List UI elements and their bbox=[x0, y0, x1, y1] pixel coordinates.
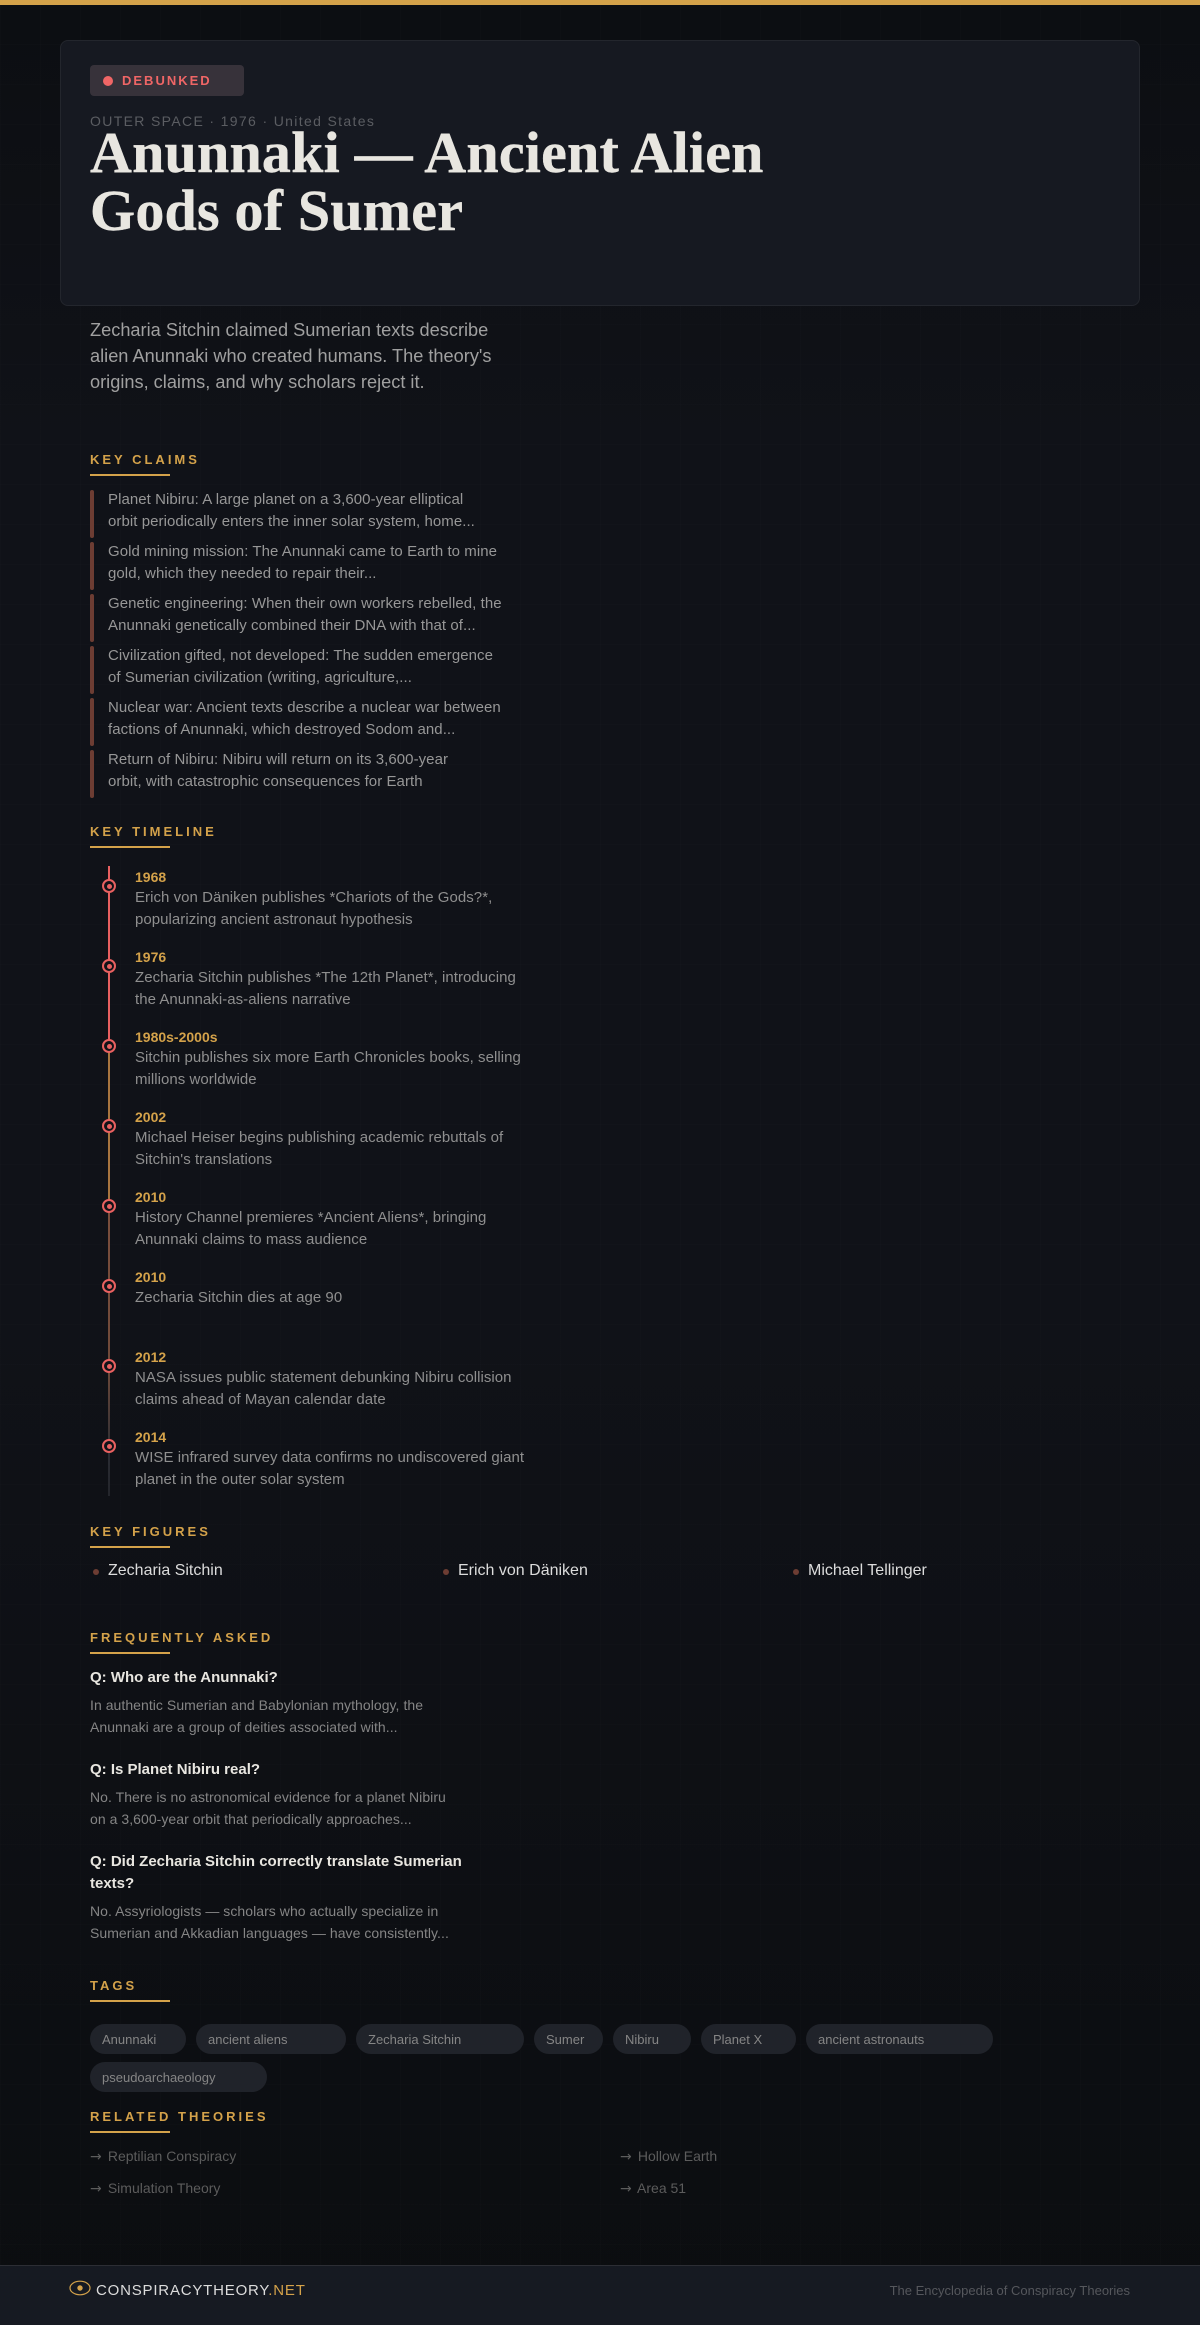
link: → Reptilian Conspiracy bbox=[90, 2148, 236, 2165]
event 2010 bbox=[102, 1189, 486, 1248]
event 2002 bbox=[102, 1109, 504, 1168]
panel: header card bbox=[60, 40, 1140, 306]
description: origins, claims, and why scholars reject it. bbox=[90, 372, 425, 392]
tag bbox=[90, 2062, 267, 2092]
heading: frequently asked: FREQUENTLY ASKED bbox=[90, 1630, 273, 1645]
event 2014: 2014 bbox=[135, 1429, 166, 1445]
faq 3: texts? bbox=[90, 1875, 134, 1892]
claim 5: factions of Anunnaki, which destroyed Sodom and... bbox=[108, 721, 455, 738]
tags bbox=[90, 2024, 993, 2092]
claim 6 bbox=[90, 750, 448, 798]
top accent bar bbox=[0, 0, 1200, 5]
event 1980s-2000s: 1980s-2000s bbox=[135, 1029, 218, 1045]
event 1976: the Anunnaki-as-aliens narrative bbox=[135, 991, 351, 1008]
related links bbox=[90, 2148, 717, 2197]
title bbox=[90, 120, 764, 243]
claim 1: orbit periodically enters the inner solar system, home... bbox=[108, 513, 475, 530]
claim 5 bbox=[90, 698, 501, 746]
event 1968: 1968 bbox=[135, 869, 166, 885]
event 1968: popularizing ancient astronaut hypothesis bbox=[135, 911, 413, 928]
tag bbox=[701, 2024, 796, 2054]
faq 3 bbox=[90, 1853, 462, 1941]
event 1980s-2000s: millions worldwide bbox=[135, 1071, 257, 1088]
claim 6: orbit, with catastrophic consequences for Earth bbox=[108, 773, 423, 790]
tag bbox=[90, 2024, 186, 2054]
event 2002: Sitchin's translations bbox=[135, 1151, 272, 1168]
icon: eye bbox=[69, 2280, 91, 2296]
badge: debunked bbox=[90, 65, 244, 96]
link: → Area 51 bbox=[620, 2180, 686, 2197]
event 2014: WISE infrared survey data confirms no undiscovered giant bbox=[135, 1449, 524, 1466]
event 2002: 2002 bbox=[135, 1109, 166, 1125]
claim 4: Civilization gifted, not developed: The sudden emergence bbox=[108, 647, 493, 664]
tag: ancient aliens bbox=[208, 2032, 288, 2047]
event 2010 death: 2010 bbox=[135, 1269, 166, 1285]
claim 2: Gold mining mission: The Anunnaki came to Earth to mine bbox=[108, 543, 497, 560]
event 2010: Anunnaki claims to mass audience bbox=[135, 1231, 367, 1248]
tag bbox=[356, 2024, 524, 2054]
link: → Hollow Earth bbox=[620, 2148, 717, 2165]
tag: pseudoarchaeology bbox=[102, 2070, 215, 2085]
heading: key timeline: KEY TIMELINE bbox=[90, 824, 217, 839]
faq 2: Q: Is Planet Nibiru real? bbox=[90, 1761, 260, 1778]
claim 4: of Sumerian civilization (writing, agriculture,... bbox=[108, 669, 412, 686]
footer tagline: The Encyclopedia of Conspiracy Theories bbox=[890, 2283, 1130, 2298]
tag: Sumer bbox=[546, 2032, 584, 2047]
faq 1: Q: Who are the Anunnaki? bbox=[90, 1669, 278, 1686]
event 1968: Erich von Däniken publishes *Chariots of the Gods?*, bbox=[135, 889, 492, 906]
faq 3: Sumerian and Akkadian languages — have consistently... bbox=[90, 1925, 449, 1941]
description bbox=[90, 320, 492, 392]
heading: related theories: RELATED THEORIES bbox=[90, 2109, 268, 2124]
event 2012: 2012 bbox=[135, 1349, 166, 1365]
event 2010 death bbox=[102, 1269, 342, 1306]
faq 3: Q: Did Zecharia Sitchin correctly translate Sumerian bbox=[90, 1853, 462, 1870]
event 2002: Michael Heiser begins publishing academic rebuttals of bbox=[135, 1129, 503, 1146]
tag: ancient astronauts bbox=[818, 2032, 924, 2047]
tag bbox=[534, 2024, 603, 2054]
heading: key claims: KEY CLAIMS bbox=[90, 452, 200, 467]
tag bbox=[196, 2024, 346, 2054]
event 1968 bbox=[102, 869, 492, 928]
event 2012: NASA issues public statement debunking Nibiru collision bbox=[135, 1369, 512, 1386]
claim 2 bbox=[90, 542, 497, 590]
badge: debunked: DEBUNKED bbox=[122, 73, 212, 88]
figure: Zecharia Sitchin: Zecharia Sitchin bbox=[108, 1562, 223, 1579]
event 2010: 2010 bbox=[135, 1189, 166, 1205]
claim 3: Anunnaki genetically combined their DNA with that of... bbox=[108, 617, 476, 634]
tag: Nibiru bbox=[625, 2032, 659, 2047]
tag bbox=[806, 2024, 993, 2054]
event 2014 bbox=[102, 1429, 524, 1488]
link: → Simulation Theory bbox=[90, 2180, 220, 2197]
event 1980s-2000s bbox=[102, 1029, 521, 1088]
claim 4 bbox=[90, 646, 493, 694]
event 1976 bbox=[102, 949, 516, 1008]
figure: Erich von Däniken: Erich von Däniken bbox=[458, 1562, 588, 1579]
faq 1: Anunnaki are a group of deities associated with... bbox=[90, 1719, 398, 1735]
claim 3 bbox=[90, 594, 502, 642]
tag bbox=[613, 2024, 691, 2054]
faq 1 bbox=[90, 1669, 423, 1735]
description: alien Anunnaki who created humans. The theory's bbox=[90, 346, 492, 366]
title: Anunnaki — Ancient Alien bbox=[90, 120, 764, 185]
footer bbox=[0, 2265, 1200, 2325]
event 1980s-2000s: Sitchin publishes six more Earth Chronicles books, selling bbox=[135, 1049, 521, 1066]
heading: tags: TAGS bbox=[90, 1978, 137, 1993]
faq 2: No. There is no astronomical evidence for a planet Nibiru bbox=[90, 1789, 446, 1805]
event 2010: History Channel premieres *Ancient Aliens*, bringing bbox=[135, 1209, 486, 1226]
event 1976: Zecharia Sitchin publishes *The 12th Planet*, introducing bbox=[135, 969, 516, 986]
title: Gods of Sumer bbox=[90, 178, 463, 243]
timeline bbox=[102, 866, 524, 1496]
event 2012: claims ahead of Mayan calendar date bbox=[135, 1391, 386, 1408]
claim 2: gold, which they needed to repair their... bbox=[108, 565, 377, 582]
event 2014: planet in the outer solar system bbox=[135, 1471, 345, 1488]
claim 5: Nuclear war: Ancient texts describe a nuclear war between bbox=[108, 699, 501, 716]
tag: Zecharia Sitchin bbox=[368, 2032, 461, 2047]
claim 1 bbox=[90, 490, 475, 538]
faq 3: No. Assyriologists — scholars who actually specialize in bbox=[90, 1903, 438, 1919]
faq 2 bbox=[90, 1761, 446, 1827]
figure: Michael Tellinger: Michael Tellinger bbox=[808, 1562, 927, 1579]
tag: Planet X bbox=[713, 2032, 762, 2047]
meta line: OUTER SPACE · 1976 · United States bbox=[90, 113, 375, 129]
description: Zecharia Sitchin claimed Sumerian texts describe bbox=[90, 320, 488, 340]
faq 1: In authentic Sumerian and Babylonian mythology, the bbox=[90, 1697, 423, 1713]
logo text: CONSPIRACYTHEORY.NET bbox=[96, 2282, 306, 2299]
event 1976: 1976 bbox=[135, 949, 166, 965]
panel: claims list bbox=[90, 490, 502, 798]
heading: key figures: KEY FIGURES bbox=[90, 1524, 211, 1539]
claim 6: Return of Nibiru: Nibiru will return on its 3,600-year bbox=[108, 751, 448, 768]
tag: Anunnaki bbox=[102, 2032, 156, 2047]
event 2012 bbox=[102, 1349, 512, 1408]
timeline line bbox=[108, 866, 110, 1496]
claim 3: Genetic engineering: When their own workers rebelled, the bbox=[108, 595, 502, 612]
claim 1: Planet Nibiru: A large planet on a 3,600-year elliptical bbox=[108, 491, 463, 508]
faq 2: on a 3,600-year orbit that periodically approaches... bbox=[90, 1811, 412, 1827]
event 2010 death: Zecharia Sitchin dies at age 90 bbox=[135, 1289, 342, 1306]
